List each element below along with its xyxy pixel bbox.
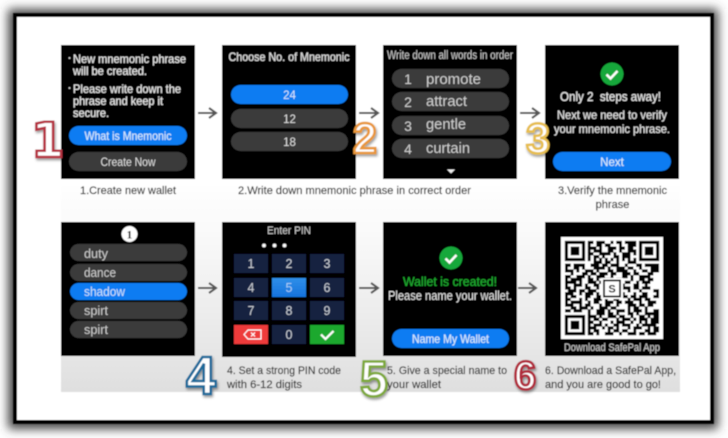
button: What is Mnemonic: What is Mnemonic [84,129,172,143]
panel: download app QR: Download SafePal App [564,342,660,354]
word option: shadow selected: shadow [84,285,126,299]
caption: step 5: 5. Give a special name to [387,365,507,377]
icon: green check [600,62,624,86]
step number 6: 6 [514,354,536,398]
panel: write down words [383,45,517,179]
word option: duty: duty [84,247,109,261]
keypad: 5 [286,281,293,295]
word option: spirt: spirt [84,323,109,337]
word option: dance: dance [84,266,116,280]
caption: step 6: 6. Download a SafePal App, [545,365,676,377]
step number 5: 5 [360,351,388,407]
keypad: 6 [324,281,331,295]
button: Name My Wallet: Name My Wallet [412,332,490,346]
keypad: 2 [286,257,293,271]
word pill: curtain: curtain [426,141,470,157]
step number 2: 2 [353,115,377,163]
keypad: 9 [324,304,331,318]
panel: wallet created [383,222,517,356]
keypad: 3 [324,257,331,271]
word pill: gentle: gentle [426,117,466,133]
caption: step 6 [545,365,676,391]
keypad: 4 [248,281,255,295]
option: 24: 24 [283,90,296,102]
panel: step 1 screen [61,45,195,179]
caption: step 3 [558,185,667,211]
text: mnemonic notice: Please write down the [73,82,181,96]
option: 18: 18 [283,137,296,149]
caption: step 3: phrase [596,199,629,211]
panel: write down words: Write down all words in order [387,50,513,62]
panel: verify notice: your mnemonic phrase. [554,122,670,136]
keypad [234,254,344,344]
keypad: 0 [286,328,293,342]
caption: step 6: and you are good to go! [545,379,661,391]
arrow: wallet created to download [518,283,536,293]
caption: step 2: 2.Write down mnemonic phrase in correct order [238,185,471,197]
panel: wallet created: Wallet is created! [403,274,497,289]
icon: SafePal logo in QR: S [608,284,616,296]
PIN dots [262,244,286,247]
text: mnemonic notice: will be created. [72,64,147,78]
arrow: word list to verification [520,108,539,118]
text: mnemonic notice: New mnemonic phrase [73,52,186,66]
step number 1: 1 [31,113,64,169]
word pill: curtain: 4 [404,141,412,157]
word pill: promote: promote [426,72,481,88]
arrow: word confirm to PIN [198,283,216,293]
panel: choose number of mnemonic: Choose No. of Mnemonic [228,50,350,64]
word pill: attract: attract [426,94,467,110]
button: Next: Next [600,157,625,169]
word pill: attract: 2 [404,94,412,110]
word pill: curtain [392,139,509,158]
word pill: gentle: 3 [404,118,412,134]
caption: step 5: your wallet [387,379,441,391]
background: light gray gradient panel [61,180,680,392]
panel: verify notice: Next we need to verify [557,108,667,122]
keypad: 8 [286,304,293,318]
caption: step 4: 4. Set a strong PIN code [227,365,341,377]
word option: spirt: spirt [84,304,109,318]
step number 4: 4 [186,346,216,406]
badge: word number 1: 1 [126,228,132,242]
panel: verify notice: Only 2 steps away! [560,89,661,104]
text: mnemonic notice [69,52,186,120]
icon: scroll down triangle [447,170,455,174]
panel: verify notice [545,45,679,179]
word pill: gentle [392,116,509,135]
panel: enter PIN keypad: Enter PIN [267,225,311,237]
text: mnemonic notice: secure. [73,106,109,120]
word pill: promote [392,69,509,88]
caption: step 1: 1.Create new wallet [80,185,176,197]
option: 12: 12 [283,114,296,126]
text: mnemonic notice: phrase and keep it [73,94,164,108]
word pill: promote: 1 [404,71,412,87]
caption: step 3: 3.Verify the mnemonic [558,185,667,197]
word pill: attract [392,92,509,111]
panel: confirm words [61,222,195,356]
panel: download app QR [545,222,679,356]
arrow: step 1 screen to mnemonic count [198,108,216,118]
keypad: 7 [248,304,255,318]
button: Create Now: Create Now [100,157,156,169]
caption: step 4 [226,365,341,391]
arrow: PIN to wallet created [359,283,378,293]
panel: choose number of mnemonic [222,45,356,179]
panel: wallet created: Please name your wallet. [388,289,512,303]
arrow: mnemonic count to word list [359,108,378,118]
keypad: 1 [248,257,255,271]
panel: enter PIN keypad [222,222,356,357]
caption: step 5 [387,365,507,391]
caption: step 4: with 6-12 digits [226,379,303,391]
step number 3: 3 [526,115,550,163]
icon: green check [440,246,462,270]
